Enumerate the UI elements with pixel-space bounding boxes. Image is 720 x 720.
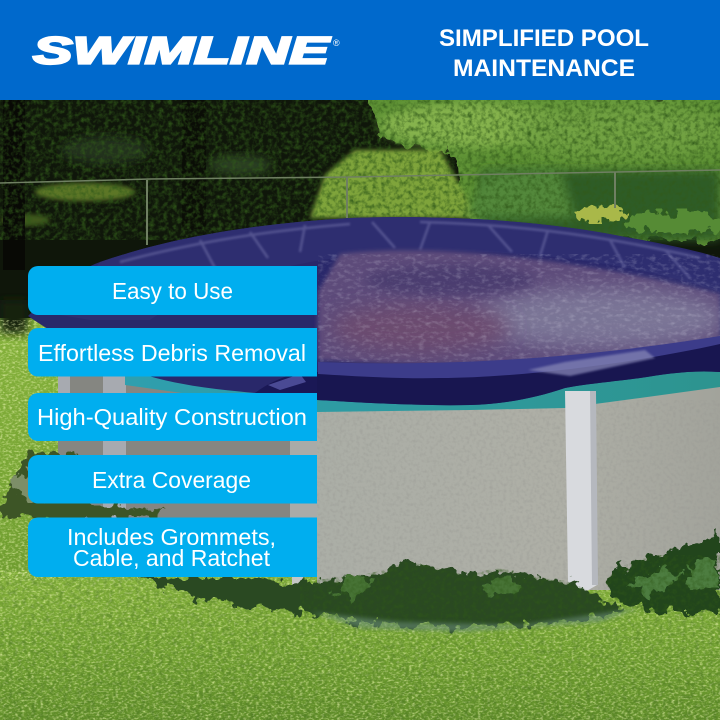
cover lip <box>317 342 720 405</box>
label: includes grommets, cable, and ratchet <box>28 518 317 577</box>
label: extra coverage: Extra Coverage <box>92 467 251 493</box>
cover folds <box>120 222 700 278</box>
logo: Swimline wordmark <box>33 30 340 72</box>
feature labels <box>28 266 317 577</box>
label: includes grommets, cable, and ratchet: Cable, and Ratchet <box>73 545 271 571</box>
header band <box>0 0 720 100</box>
label: effortless debris removal <box>28 328 317 376</box>
heading: simplified pool maintenance <box>439 25 649 82</box>
ground and left grass <box>0 300 720 720</box>
shrubs along the pool base <box>0 450 720 632</box>
teal top rail <box>125 372 720 412</box>
label: easy to use <box>28 266 317 315</box>
logo: Swimline wordmark: SWIMLINE <box>33 30 332 72</box>
label: includes grommets, cable, and ratchet: Includes Grommets, <box>67 524 276 550</box>
pool wall <box>58 370 720 591</box>
background trees and lawn <box>0 100 720 318</box>
chain-link fence <box>0 170 720 245</box>
logo: Swimline wordmark: ® <box>333 38 340 48</box>
pool cover <box>28 217 720 405</box>
pool post <box>565 391 598 592</box>
label: extra coverage <box>28 455 317 504</box>
label: high-quality construction <box>28 393 317 441</box>
label: effortless debris removal: Effortless Debris Removal <box>38 340 306 366</box>
heading: simplified pool maintenance: SIMPLIFIED POOL <box>439 25 649 52</box>
label: easy to use: Easy to Use <box>112 278 233 304</box>
label: high-quality construction: High-Quality Construction <box>37 404 307 430</box>
heading: simplified pool maintenance: MAINTENANCE <box>453 55 635 82</box>
